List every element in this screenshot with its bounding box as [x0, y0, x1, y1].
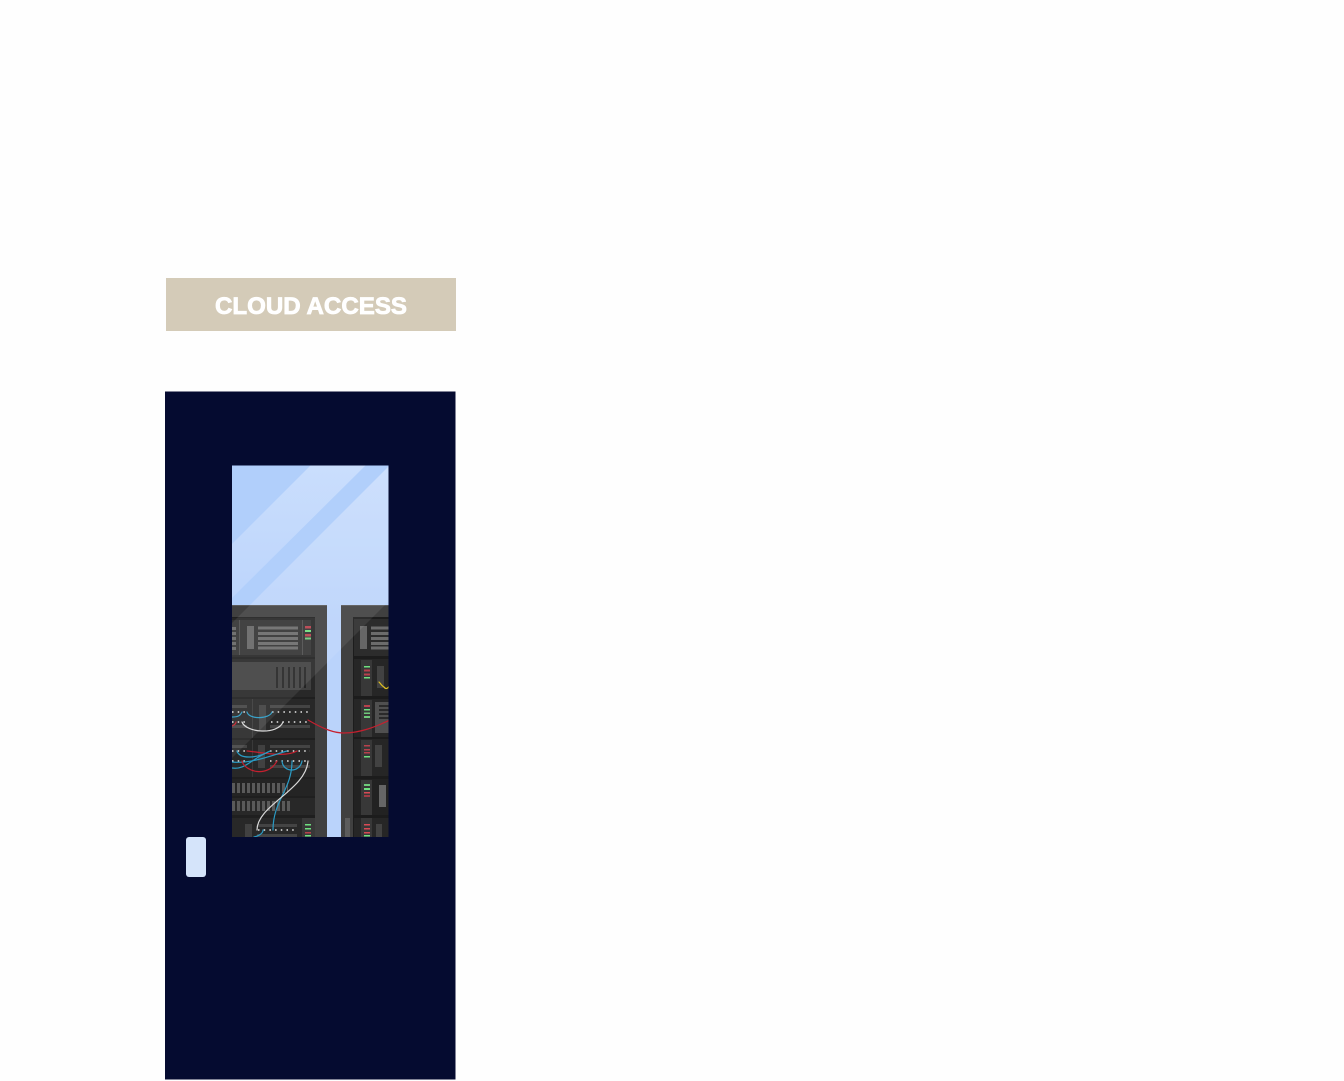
right rack unit 6 — [354, 818, 390, 837]
rack unit 5: vent — [232, 783, 288, 793]
window glass — [232, 465, 390, 837]
door handle — [186, 837, 206, 877]
server rack left — [225, 605, 327, 837]
heading banner: cloud access: CLOUD ACCESS — [215, 293, 407, 320]
network cables — [232, 682, 390, 837]
cables in rack unit 4 — [232, 751, 302, 772]
door window with server racks — [225, 465, 391, 837]
rack unit 1 — [232, 620, 311, 655]
rack unit 3 — [225, 699, 315, 738]
heading banner: cloud access — [166, 278, 456, 331]
right rack unit 1 — [354, 619, 391, 656]
rack unit 6: vent — [225, 798, 315, 815]
glass reflection over racks — [232, 605, 384, 758]
rack unit 2 — [232, 662, 315, 697]
cables in rack unit 3 — [232, 682, 390, 731]
long cables to lower unit — [254, 761, 308, 837]
rack unit 7 — [225, 818, 315, 837]
right rack unit 5 — [361, 780, 386, 815]
right rack unit 3 — [354, 699, 390, 737]
red cable between racks — [308, 720, 390, 733]
right rack unit 2 — [354, 659, 390, 696]
rack unit 4 — [225, 740, 315, 777]
right rack unit 4 — [354, 739, 390, 776]
door panel — [165, 392, 456, 1080]
server rack right — [341, 605, 391, 837]
